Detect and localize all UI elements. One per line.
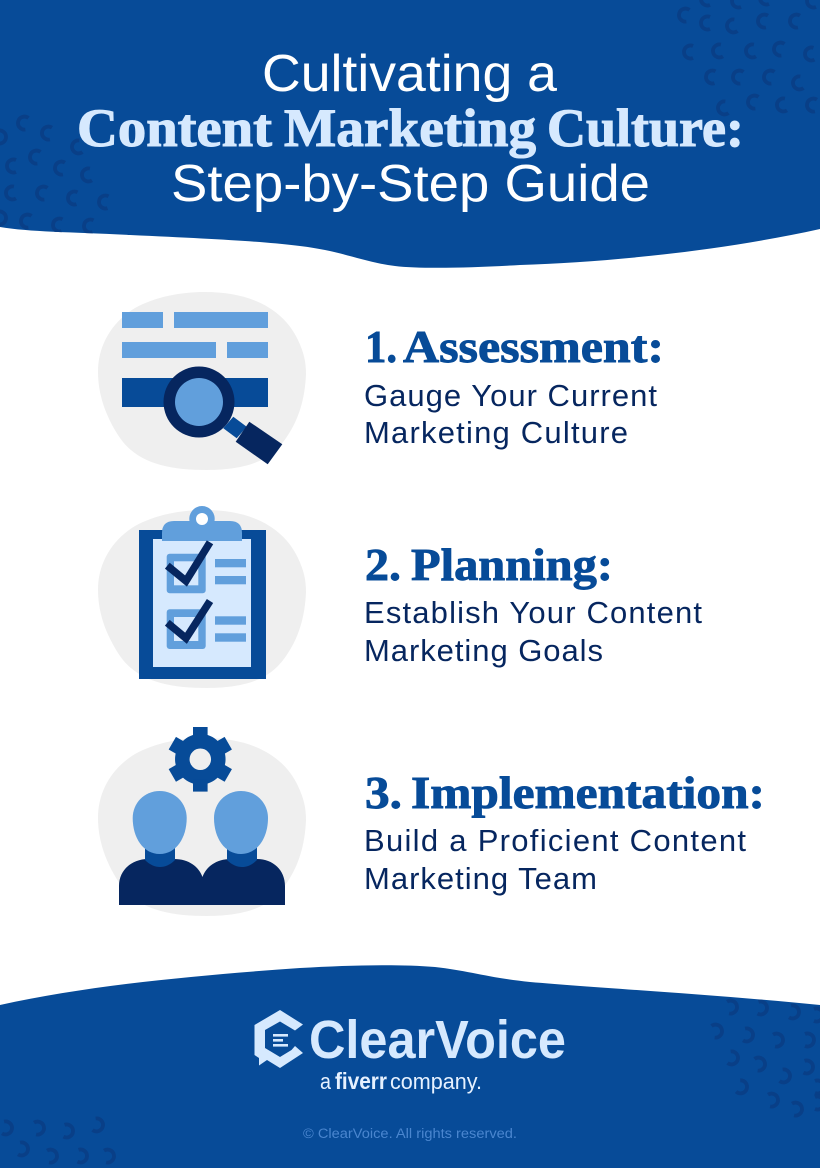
text: build a proficient content marketing team: Build a Proficient Content [364, 823, 746, 858]
step 3: implementation [98, 727, 765, 916]
icon: clipboard checklist [98, 506, 306, 688]
title [77, 45, 744, 213]
footer banner [0, 965, 820, 1168]
title: Step-by-Step Guide [171, 155, 650, 213]
step 1: assessment [98, 292, 664, 470]
text: build a proficient content marketing team: Marketing Team [364, 861, 597, 896]
heading: 3. Implementation: Implementation: [411, 767, 765, 818]
icon: team with gear [98, 727, 306, 916]
heading: 2. Planning: 2. [365, 539, 401, 590]
text: gauge your current marketing culture: Marketing Culture [364, 415, 628, 450]
text: establish your content marketing goals: Marketing Goals [364, 633, 603, 668]
heading: 2. Planning: Planning: [411, 539, 613, 590]
text: build a proficient content marketing team [364, 823, 746, 896]
text: establish your content marketing goals [364, 595, 702, 668]
tagline: a fiverr company: fiverr [335, 1068, 387, 1094]
icon: document with magnifying glass [98, 292, 306, 470]
title: Marketing [284, 98, 536, 158]
heading: 1. Assessment: 1. [365, 321, 397, 372]
title: Cultivating a [262, 45, 557, 103]
tagline: a fiverr company: a [320, 1069, 332, 1094]
step 2: planning [98, 506, 702, 688]
logo: ClearVoice wordmark: ClearVoice [309, 1010, 566, 1070]
tagline: a fiverr company: company. [390, 1069, 482, 1094]
text: establish your content marketing goals: Establish Your Content [364, 595, 702, 630]
text: gauge your current marketing culture: Gauge Your Current [364, 378, 657, 413]
heading: 1. Assessment: Assessment: [403, 321, 664, 372]
title: Culture: [547, 98, 744, 158]
title: Content [77, 98, 272, 158]
logo: ClearVoice mark [254, 1010, 303, 1068]
header banner [0, 0, 820, 268]
text: gauge your current marketing culture [364, 378, 657, 450]
tagline: a fiverr company [320, 1068, 482, 1094]
copyright: © ClearVoice. All rights reserved. [303, 1126, 517, 1141]
heading: 3. Implementation: 3. [365, 767, 402, 818]
